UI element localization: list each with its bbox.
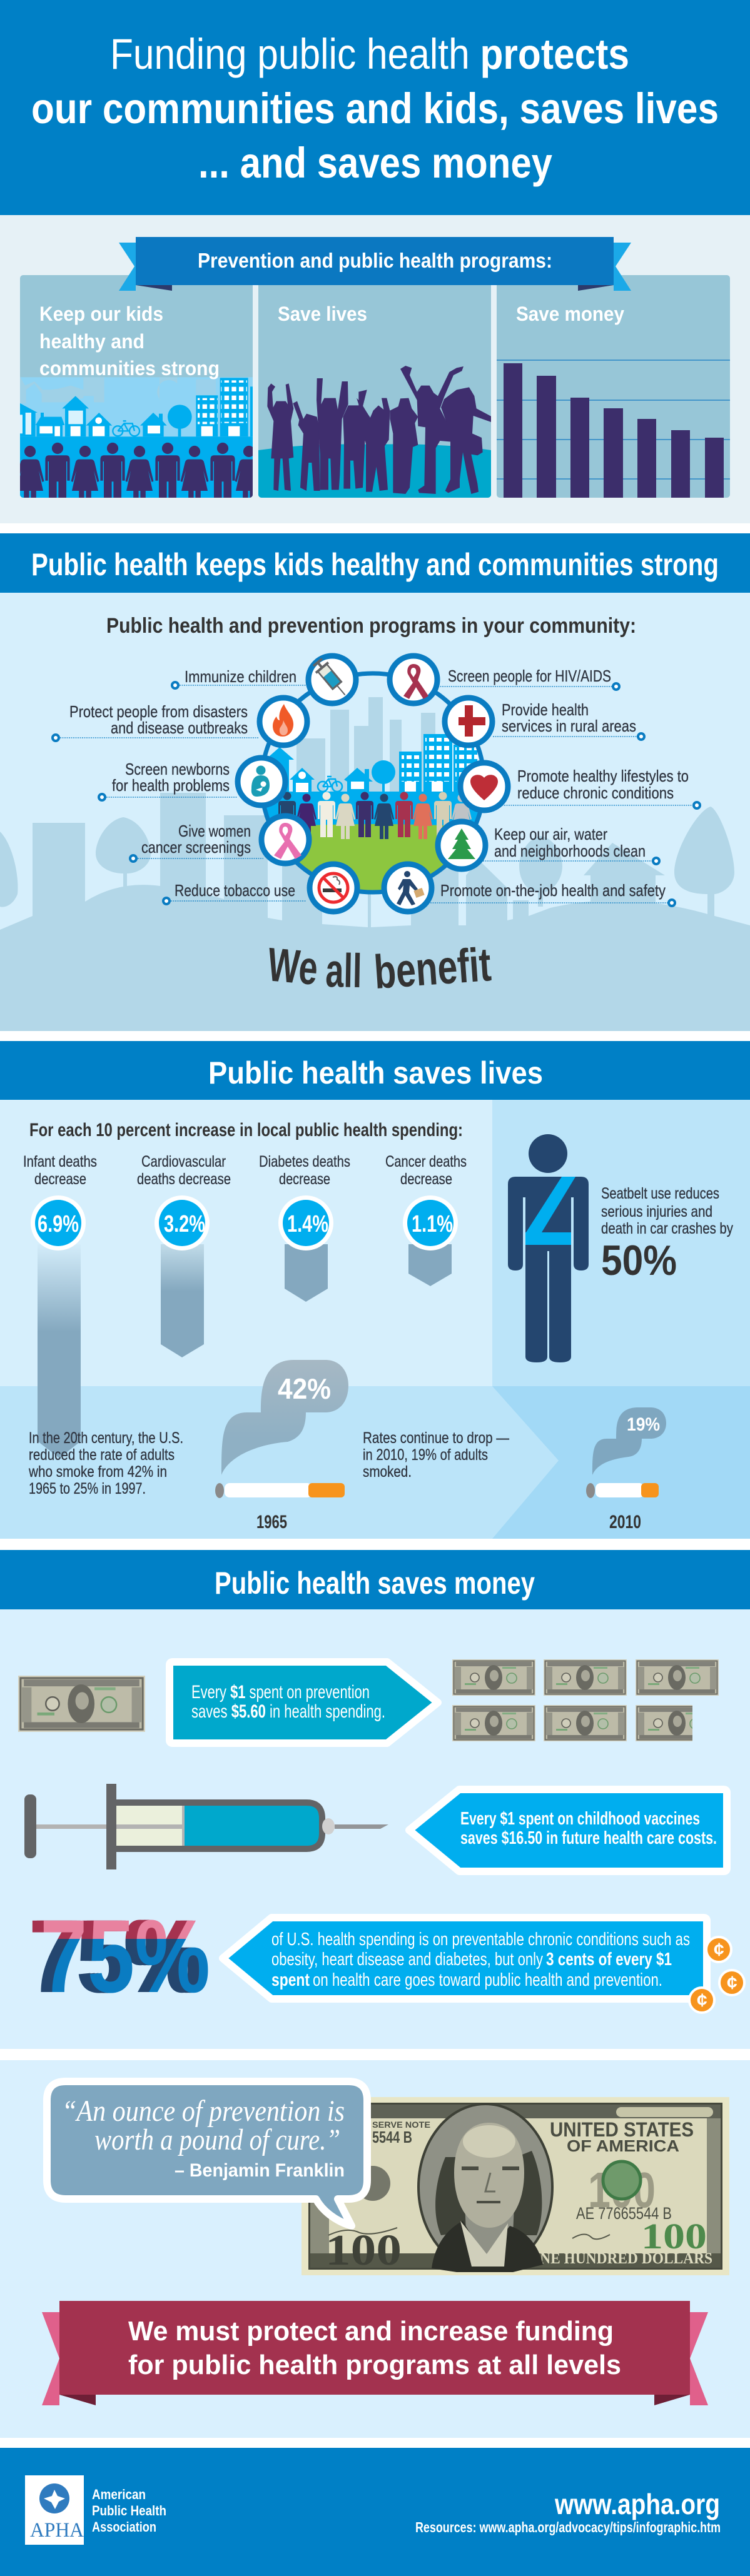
- speech bubble quote: “An ounce of prevention is: [62, 2095, 345, 2128]
- icon: single dollar bill: [18, 1676, 145, 1732]
- smoking text 1965: who smoke from 42% in: [28, 1463, 167, 1481]
- icon: no smoking: [310, 864, 357, 912]
- chart: infant deaths: Infant deaths: [23, 1153, 97, 1170]
- statistic: 75 percent: 75%: [29, 1899, 199, 2015]
- panel: prevention programs: [0, 215, 750, 523]
- we all benefit: We: [266, 938, 320, 995]
- icon: seatbelt figure: [508, 1134, 589, 1362]
- we all benefit: all: [325, 944, 362, 998]
- bill text: 100: [588, 2162, 656, 2218]
- chart: cardiovascular deaths: deaths decrease: [137, 1170, 231, 1188]
- portrait: [418, 2104, 552, 2272]
- smoking text 1965: 1965 to 25% in 1997.: [29, 1480, 146, 1497]
- smoking text 1965: [28, 1429, 183, 1497]
- APHA logo: APHA: [30, 2519, 84, 2542]
- label: immunize children: Immunize children: [185, 667, 296, 686]
- chart: cardiovascular deaths: 3.2%: [164, 1211, 205, 1237]
- panel label: [39, 303, 220, 380]
- smoking text 2010: in 2010, 19% of adults: [363, 1446, 488, 1464]
- icon: large syringe: [24, 1784, 388, 1869]
- section header: saves lives: Public health saves lives: [208, 1055, 543, 1090]
- label: disasters: [53, 702, 258, 741]
- children silhouettes: [267, 366, 492, 494]
- label: newborns: [99, 760, 237, 800]
- bill text: SERVE NOTE: [372, 2120, 430, 2130]
- bill text: UNITED STATES: [550, 2118, 694, 2141]
- icon: tree: [438, 822, 485, 869]
- label: clean air: and neighborhoods clean: [494, 842, 646, 860]
- subheading: For each 10 percent increase in local public health spending:: [29, 1120, 463, 1140]
- panel: community programs: [0, 593, 750, 1031]
- panel: save money: [497, 275, 730, 498]
- icon: bicycle: [113, 421, 139, 436]
- callout: chronic conditions: [223, 1918, 707, 1999]
- callout: vaccine savings: [409, 1789, 727, 1871]
- label: clean air: [483, 825, 659, 864]
- icon: mother and newborn: [238, 758, 285, 805]
- panel: saves lives: [0, 1100, 750, 1539]
- chart: cancer deaths: [385, 1153, 467, 1286]
- title text: Funding public health protects: [110, 30, 629, 78]
- ribbon: call to action: We must protect and increase funding: [128, 2316, 614, 2347]
- organisation name: American: [92, 2487, 146, 2502]
- organisation name: [92, 2487, 166, 2535]
- icon: flame: [260, 698, 307, 745]
- chart: cancer deaths: 1.1%: [412, 1211, 453, 1237]
- label: cancer screenings: cancer screenings: [141, 838, 251, 857]
- callout: chronic conditions: spent: [271, 1970, 310, 1990]
- community scene: [262, 672, 484, 894]
- we all benefit: [266, 938, 493, 999]
- section header: communities: [0, 533, 750, 593]
- smoking text 1965: reduced the rate of adults: [29, 1446, 175, 1464]
- cigarette 2010 with smoke: 2010: [609, 1512, 641, 1532]
- panel label: Save lives: [278, 303, 367, 325]
- we all benefit: benefit: [372, 938, 493, 999]
- chart: diabetes deaths: 1.4%: [287, 1211, 328, 1237]
- ribbon: call to action: for public health programs at all levels: [128, 2350, 621, 2380]
- hundred dollar bill: [302, 2097, 729, 2275]
- section header: saves money: Public health saves money: [215, 1566, 535, 1601]
- bill text: [372, 2118, 694, 2218]
- section header: saves money: [0, 1550, 750, 1609]
- organisation name: Public Health: [92, 2503, 166, 2518]
- smoking text 1965: In the 20th century, the U.S.: [29, 1429, 183, 1447]
- label: disasters: Protect people from disasters: [69, 702, 248, 721]
- callout: prevention savings: Every $1 spent on prevention: [191, 1682, 370, 1703]
- label: rural services: services in rural areas: [502, 717, 636, 735]
- hundred dollar bill: ONE HUNDRED DOLLARS: [529, 2250, 712, 2267]
- label: HIV screening: Screen people for HIV/AIDS: [448, 667, 611, 685]
- label: cancer screenings: Give women: [178, 822, 251, 840]
- APHA logo: [25, 2475, 84, 2545]
- icon: bicycle: [318, 777, 342, 792]
- panel label: communities strong: [39, 357, 220, 380]
- chart: infant deaths: [23, 1153, 97, 1458]
- title banner: [0, 0, 750, 215]
- cigarette 1965 with smoke: [215, 1360, 348, 1532]
- label: rural services: Provide health: [502, 700, 589, 719]
- label: job safety: Promote on-the-job health and safety: [440, 881, 666, 900]
- section header: saves lives: [0, 1041, 750, 1100]
- people row: [20, 443, 253, 498]
- hundred dollar bill: 100: [325, 2226, 402, 2275]
- seatbelt text: [601, 1185, 733, 1284]
- seatbelt text: serious injuries and: [601, 1203, 712, 1220]
- label: healthy lifestyles: Promote healthy lifestyles to: [517, 767, 689, 785]
- hundred dollar bill: AE 77665544 B: [576, 2204, 672, 2223]
- callout: prevention savings: [170, 1662, 438, 1743]
- chart: diabetes deaths: [259, 1153, 350, 1302]
- panel: saves money: [0, 1609, 750, 2049]
- bill text: 5544 B: [372, 2128, 412, 2146]
- title text: [31, 30, 719, 187]
- footer: [0, 2448, 750, 2576]
- chart: diabetes deaths: decrease: [279, 1170, 330, 1188]
- icon: heart: [460, 763, 508, 810]
- label: disasters: and disease outbreaks: [111, 718, 248, 737]
- label: heading: Public health and prevention programs in your community:: [106, 614, 636, 638]
- chart: cancer deaths: Cancer deaths: [385, 1153, 467, 1170]
- bar chart: [504, 363, 724, 498]
- statistic: 75 percent: [33, 1919, 208, 1993]
- chart: infant deaths: decrease: [34, 1170, 86, 1188]
- label: tobacco: [163, 881, 306, 904]
- cigarette 2010 with smoke: 19%: [627, 1414, 660, 1435]
- people group: [278, 792, 472, 839]
- cigarette 1965 with smoke: 42%: [278, 1372, 331, 1405]
- speech bubble quote: worth a pound of cure.”: [94, 2123, 340, 2156]
- panel: save lives: [258, 275, 492, 498]
- label: HIV screening: [438, 667, 619, 690]
- callout: chronic conditions: 3 cents of every $1: [546, 1950, 672, 1970]
- website: www.apha.org: [554, 2488, 720, 2520]
- cigarette 1965 with smoke: 1965: [256, 1512, 287, 1532]
- icon: walker: [384, 864, 432, 912]
- organisation name: Association: [92, 2519, 156, 2535]
- panel: keep kids healthy: [20, 275, 253, 498]
- icon: cross: [445, 698, 492, 745]
- smoking text 2010: smoked.: [363, 1463, 412, 1481]
- panel: closing: [0, 2060, 750, 2438]
- label: cancer screenings: [130, 822, 263, 862]
- icon: six dollar bills: [452, 1659, 719, 1741]
- panel label: healthy and: [39, 330, 144, 353]
- label: job safety: [430, 881, 675, 906]
- hundred dollar bill: 100: [641, 2216, 707, 2257]
- chart: infant deaths: 6.9%: [38, 1211, 79, 1237]
- icon: syringe: [308, 656, 356, 703]
- chart: cardiovascular deaths: [137, 1153, 231, 1357]
- label: tobacco: Reduce tobacco use: [175, 881, 295, 900]
- smoking text 2010: [363, 1429, 509, 1481]
- ribbon heading: [119, 237, 631, 291]
- callout: prevention savings: saves $5.60 in health spending.: [191, 1701, 385, 1722]
- chart: cancer deaths: decrease: [400, 1170, 452, 1188]
- seatbelt text: 50%: [601, 1237, 677, 1284]
- icon: coins: ¢: [727, 1973, 737, 1993]
- speech bubble quote: [47, 2081, 367, 2226]
- ribbon: call to action: [42, 2301, 708, 2405]
- label: newborns: for health problems: [112, 776, 230, 795]
- chart: diabetes deaths: Diabetes deaths: [259, 1153, 350, 1170]
- icon: red ribbon: [390, 656, 437, 703]
- speech bubble quote: – Benjamin Franklin: [175, 2160, 345, 2181]
- windows and doors: [20, 411, 240, 436]
- title text: ... and saves money: [198, 139, 552, 187]
- icon: coins: ¢: [714, 1940, 724, 1960]
- background skyline: [0, 697, 750, 1031]
- panel label: Save money: [516, 303, 624, 325]
- ribbon heading: Prevention and public health programs:: [198, 249, 552, 272]
- bill text: OF AMERICA: [567, 2136, 679, 2155]
- skyline houses: [20, 378, 256, 436]
- label: newborns: Screen newborns: [125, 760, 230, 778]
- smoking text 2010: Rates continue to drop —: [363, 1429, 509, 1447]
- seatbelt text: Seatbelt use reduces: [601, 1185, 719, 1202]
- callout: chronic conditions: obesity, heart disease and diabetes, but only: [271, 1950, 543, 1970]
- icon: pink ribbon: [261, 816, 309, 863]
- cigarette 2010 with smoke: [586, 1407, 666, 1532]
- label: healthy lifestyles: reduce chronic conditions: [517, 783, 674, 802]
- chart: cardiovascular deaths: Cardiovascular: [141, 1153, 226, 1170]
- label: healthy lifestyles: [500, 767, 700, 808]
- icon: coins: ¢: [697, 1990, 707, 2011]
- panel label: Keep our kids: [39, 303, 163, 325]
- label: rural services: [493, 700, 644, 740]
- icon: coins: [689, 1937, 744, 2013]
- label: clean air: Keep our air, water: [494, 825, 607, 843]
